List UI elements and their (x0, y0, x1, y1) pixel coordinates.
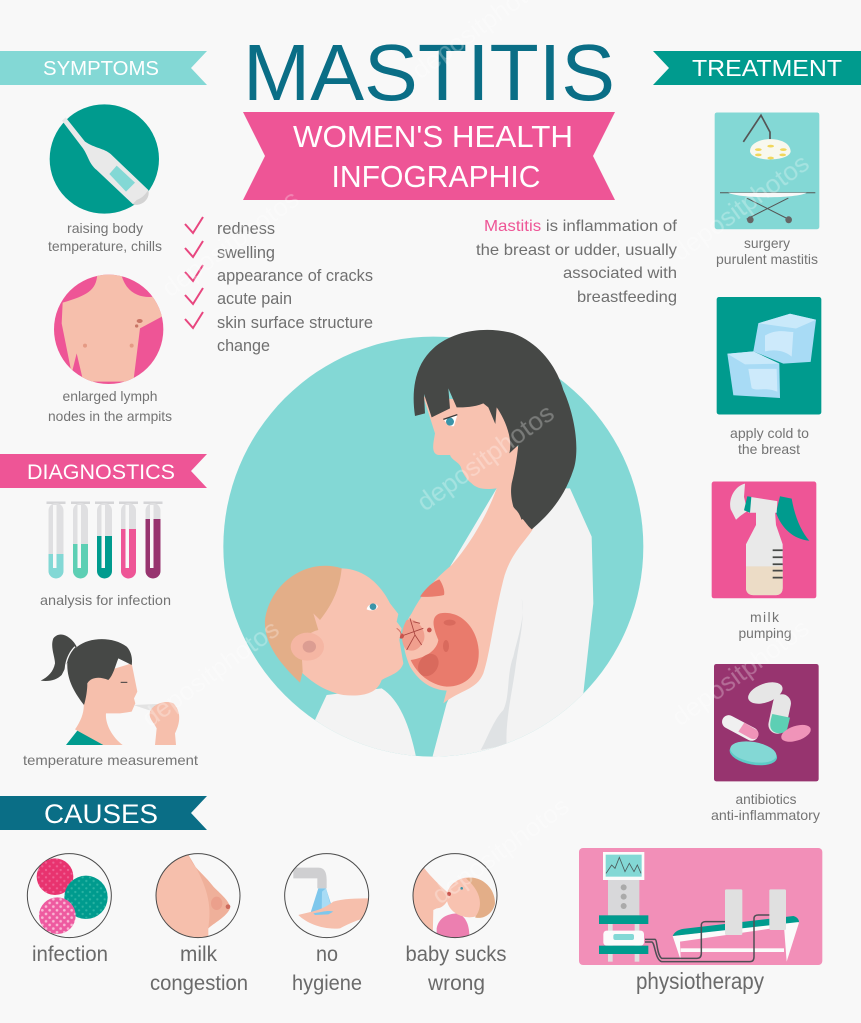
watermark: depositphotos (411, 397, 560, 517)
mother's hair (414, 330, 576, 529)
banner: treatment: TREATMENT (692, 55, 842, 81)
icon: breast (153, 853, 240, 940)
definition text: associated with (563, 265, 677, 282)
symptom checklist: swelling (217, 243, 275, 262)
symptom checklist: acute pain (217, 289, 292, 308)
icon: tap and hand (285, 854, 370, 938)
panel: body temperature symptom (48, 104, 162, 254)
label (406, 943, 506, 995)
icon: pills (714, 664, 819, 781)
panel: treatment milk pump (712, 481, 816, 641)
panel: cause no hygiene (285, 854, 370, 995)
subtitle ribbon: INFOGRAPHIC (332, 159, 540, 194)
watermark: depositphotos (666, 147, 815, 267)
label: apply cold to (730, 425, 809, 441)
banner: symptoms (0, 51, 207, 85)
panel: treatment surgery: purulent mastitis (716, 251, 818, 267)
definition text: the breast or udder, usually (476, 242, 677, 259)
panel: body temperature symptom: temperature, chills (48, 238, 162, 254)
panel: treatment physiotherapy (579, 848, 822, 994)
label: infection (32, 943, 108, 966)
symptom checklist: change (217, 336, 270, 355)
label: antibiotics (736, 791, 796, 807)
central illustration: breastfeeding mother and baby (223, 330, 643, 760)
panel: cause milk congestion (150, 853, 248, 995)
definition text: breastfeeding (577, 289, 677, 306)
panel: treatment antibiotics (711, 664, 820, 823)
chart: test tubes (46, 502, 162, 579)
mother's shirt (432, 488, 593, 760)
label: milk (750, 609, 780, 625)
label: enlarged lymph (62, 388, 158, 404)
label (150, 943, 248, 995)
banner: diagnostics: DIAGNOSTICS (27, 461, 175, 484)
icon: woman with thermometer (41, 635, 179, 745)
banner: causes (0, 796, 207, 830)
panel: analysis for infection (40, 502, 171, 608)
icon: physiotherapy apparatus (579, 848, 822, 965)
label: no (316, 943, 338, 966)
label: milk (180, 943, 217, 966)
panel: treatment milk pump: pumping (738, 625, 792, 641)
icon: baby nursing (412, 853, 497, 940)
symptom checklist (185, 217, 373, 355)
icon: thermometer in circle (50, 104, 159, 214)
panel: cause infection (27, 854, 111, 966)
banner: symptoms: SYMPTOMS (43, 58, 159, 80)
baby ear (291, 633, 324, 661)
definition text: Mastitis is inflammation of (484, 218, 678, 235)
panel: treatment cold (717, 297, 821, 457)
label: temperature measurement (23, 752, 198, 768)
baby shirt (315, 688, 417, 760)
panel: temperature measurement (23, 635, 198, 768)
label: analysis for infection (40, 592, 171, 608)
banner: diagnostics (0, 454, 207, 488)
subtitle ribbon (243, 112, 615, 200)
label: wrong (427, 972, 485, 995)
breast lobes (420, 579, 444, 597)
label: hygiene (292, 972, 362, 995)
shirt fold (481, 598, 523, 750)
icon: chest with lymph nodes (54, 272, 165, 384)
panel: treatment surgery (715, 112, 819, 267)
symptom checklist: redness (217, 219, 275, 238)
label: raising body (67, 220, 143, 236)
icon: bacteria balls (27, 854, 111, 938)
definition text (476, 218, 678, 306)
baby face (291, 568, 403, 696)
label: surgery (744, 235, 790, 251)
panel: lymph node symptom: nodes in the armpits (48, 408, 172, 424)
title: MASTITIS (243, 28, 615, 117)
icon: operating lamp and stretcher (715, 112, 819, 229)
watermark: depositphotos (136, 613, 285, 733)
icon: ice cubes (717, 297, 821, 414)
watermark: depositphotos (156, 183, 305, 303)
baby hair (265, 566, 342, 683)
panel: treatment cold: the breast (738, 441, 800, 457)
watermark: depositphotos (666, 612, 815, 732)
baby eye (367, 604, 378, 610)
panel: lymph node symptom (48, 272, 172, 424)
subtitle ribbon: WOMEN'S HEALTH (293, 119, 573, 154)
mother's eye (444, 415, 457, 426)
panel: cause baby sucks wrong (406, 853, 506, 995)
icon: breast pump (712, 481, 816, 598)
symptom checklist: skin surface structure (217, 313, 373, 332)
panel: treatment antibiotics: anti-inflammatory (711, 807, 820, 823)
banner: treatment (653, 51, 861, 85)
label: physiotherapy (636, 968, 764, 994)
watermark: depositphotos (426, 790, 575, 910)
watermark (136, 0, 815, 910)
label (292, 943, 362, 995)
label: baby sucks (406, 943, 506, 966)
mother's skin and breast (403, 397, 533, 703)
label: congestion (150, 972, 248, 995)
banner: causes: CAUSES (44, 799, 158, 829)
symptom checklist: appearance of cracks (217, 266, 373, 285)
